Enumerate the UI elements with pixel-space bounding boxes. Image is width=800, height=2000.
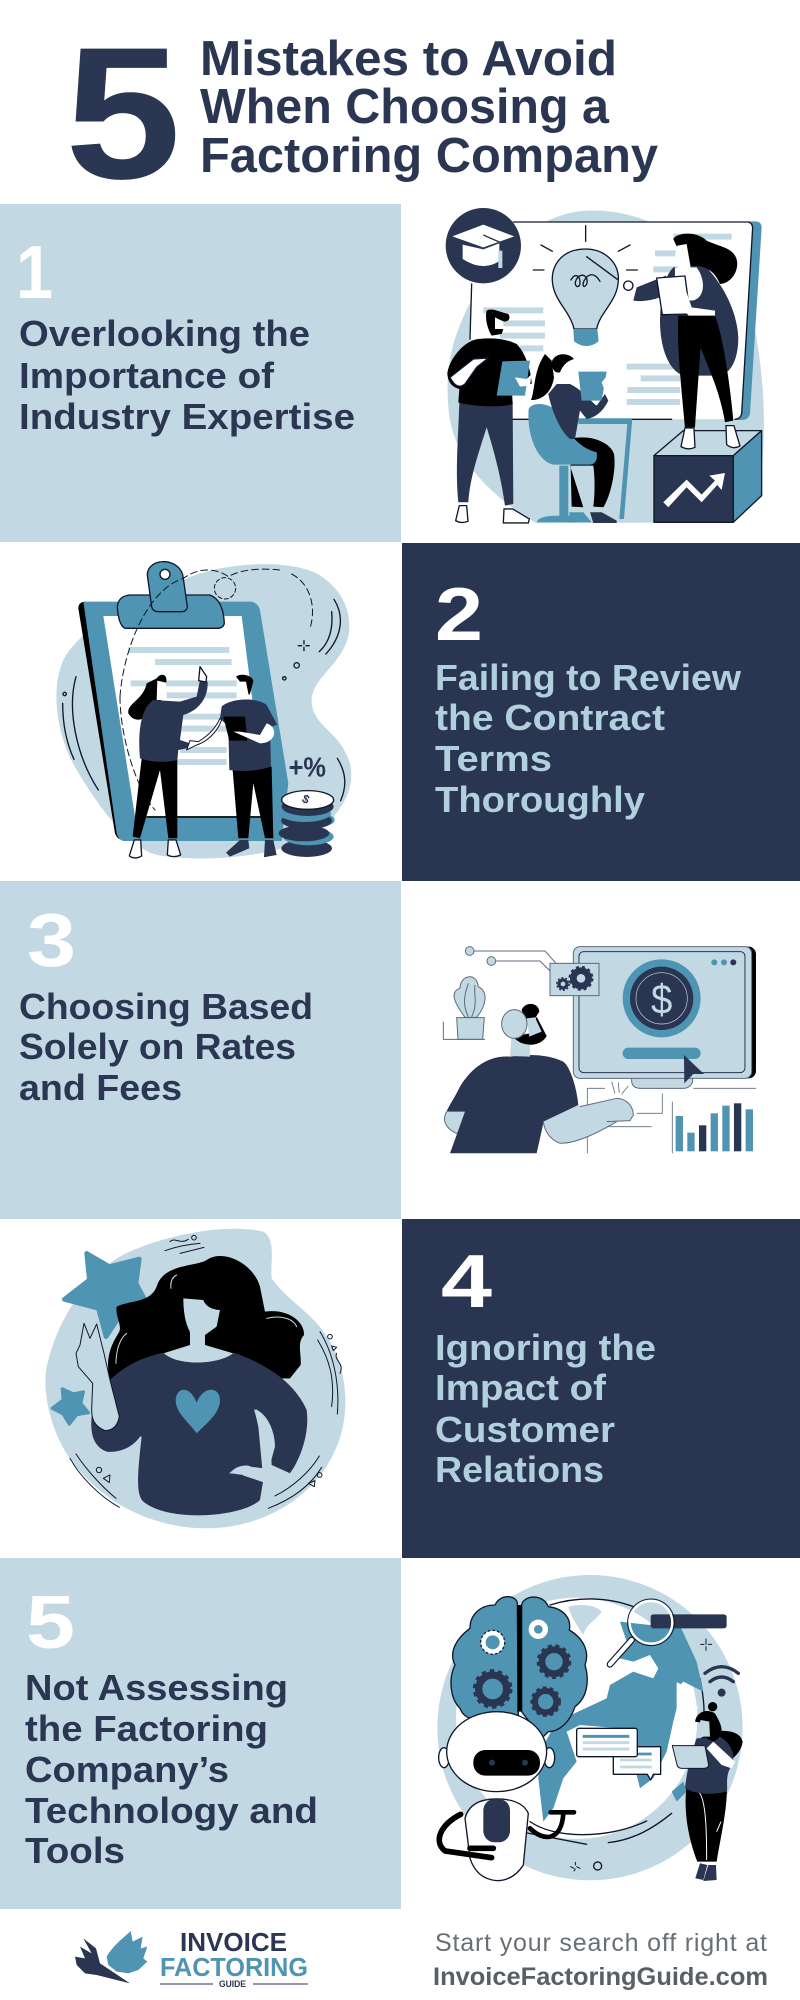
- heading: failing to review contract terms: [435, 657, 742, 820]
- plant in pot: [443, 977, 485, 1039]
- heading: choosing based on rates and fees: Choosing Based: [19, 986, 313, 1027]
- figure: robot: [439, 1712, 574, 1881]
- coin stack with percent sign: [279, 752, 335, 857]
- desk lines: [587, 1088, 756, 1153]
- panel: mistake 2: [402, 543, 800, 881]
- decorative marks: [70, 1235, 341, 1508]
- title text: When Choosing a: [200, 80, 610, 134]
- coin stack with percent sign: $: [300, 791, 312, 807]
- box with rising arrow: [654, 431, 762, 522]
- big number 5: 5: [65, 8, 181, 218]
- icon: large star: [64, 1253, 145, 1337]
- footer logo: [75, 1929, 308, 1989]
- figure: woman: [128, 667, 208, 858]
- heading: choosing based on rates and fees: Solely on Rates: [19, 1026, 296, 1067]
- heading: failing to review contract terms: Thoroughly: [435, 779, 645, 820]
- number 1: 1: [16, 230, 53, 314]
- footer call to action: [433, 1929, 768, 1991]
- footer call to action: Start your search off right at: [435, 1929, 767, 1957]
- heading: ignoring customer relations: Customer: [435, 1409, 615, 1450]
- monitor: [573, 947, 756, 1088]
- panel: mistake 3: [0, 881, 401, 1219]
- figure: man with tablet: [447, 310, 532, 523]
- dashed path decoration: [120, 569, 312, 810]
- title text: Mistakes to Avoid: [200, 32, 617, 86]
- icon: wifi: [705, 1667, 738, 1697]
- heading: choosing based on rates and fees: [19, 986, 313, 1108]
- panel: mistake 1: [0, 204, 401, 542]
- heading: not assessing technology and tools: [25, 1667, 318, 1871]
- magnifying glass and search bar: [610, 1599, 727, 1664]
- number 5: 5: [26, 1580, 75, 1664]
- heading: overlooking industry expertise: Importance of: [19, 355, 275, 396]
- figure: seated woman on chair: [528, 354, 617, 523]
- bar chart: [676, 1103, 753, 1151]
- number 2: 2: [435, 572, 483, 656]
- figure: presenter woman: [624, 234, 740, 449]
- heading: choosing based on rates and fees: and Fees: [19, 1067, 182, 1108]
- illustration: team around a lightbulb board: [446, 208, 764, 523]
- logo wordmark: INVOICE: [180, 1929, 287, 1957]
- illustration: woman with heart sweater and stars: [45, 1229, 345, 1528]
- title text: Factoring Company: [200, 129, 658, 183]
- logo wordmark: FACTORING: [160, 1954, 308, 1982]
- heading: ignoring customer relations: Ignoring the: [435, 1327, 656, 1368]
- table: [578, 418, 632, 519]
- gears and wires: [465, 947, 599, 996]
- logo wordmark: [160, 1929, 308, 1989]
- globe land masses: [538, 1605, 703, 1822]
- icon: heart: [176, 1390, 220, 1433]
- chat bubbles: [577, 1728, 661, 1780]
- heading: failing to review contract terms: Terms: [435, 738, 552, 779]
- panel: mistake 4: [402, 1219, 800, 1558]
- illustration: man at computer with dollar sign: [443, 947, 756, 1153]
- logo wordmark: GUIDE: [219, 1979, 246, 1989]
- decorative marks: [571, 1639, 712, 1871]
- figure: man: [187, 675, 277, 857]
- heading: not assessing technology and tools: Not Assessing: [25, 1667, 288, 1708]
- figure: woman with tablet: [672, 1702, 743, 1881]
- title text: [200, 32, 658, 183]
- figure: man from behind: [445, 1004, 633, 1153]
- footer call to action: InvoiceFactoringGuide.com: [433, 1963, 768, 1991]
- heading: failing to review contract terms: Failing to Review: [435, 657, 742, 698]
- coin stack with percent sign: +%: [289, 752, 326, 783]
- clipboard: [78, 562, 288, 841]
- icon: small star: [52, 1389, 88, 1424]
- number 3: 3: [27, 898, 76, 982]
- monitor: $: [651, 976, 672, 1022]
- heading: failing to review contract terms: the Contract: [435, 697, 665, 738]
- icon: graduation cap: [446, 208, 521, 283]
- heading: not assessing technology and tools: Company’s: [25, 1749, 229, 1790]
- number 4: 4: [441, 1239, 492, 1323]
- icon: light bulb: [533, 226, 637, 346]
- icon: brain with gears: [451, 1597, 587, 1738]
- heading: not assessing technology and tools: Tools: [25, 1830, 125, 1871]
- heading: overlooking industry expertise: [19, 313, 355, 437]
- heading: overlooking industry expertise: Industry Expertise: [19, 396, 355, 437]
- illustration: robot, brain and globe: [437, 1575, 743, 1881]
- illustration: clipboard with handshake: [56, 562, 351, 858]
- heading: ignoring customer relations: Relations: [435, 1449, 604, 1490]
- figure: woman: [76, 1256, 307, 1515]
- panel: mistake 5: [0, 1558, 401, 1909]
- heading: not assessing technology and tools: Technology and: [25, 1790, 318, 1831]
- heading: not assessing technology and tools: the Factoring: [25, 1708, 268, 1749]
- title: [65, 8, 658, 218]
- heading: overlooking industry expertise: Overlooking the: [19, 313, 310, 354]
- logo mark: wings: [75, 1931, 147, 1983]
- heading: ignoring customer relations: [435, 1327, 656, 1490]
- heading: ignoring customer relations: Impact of: [435, 1367, 607, 1408]
